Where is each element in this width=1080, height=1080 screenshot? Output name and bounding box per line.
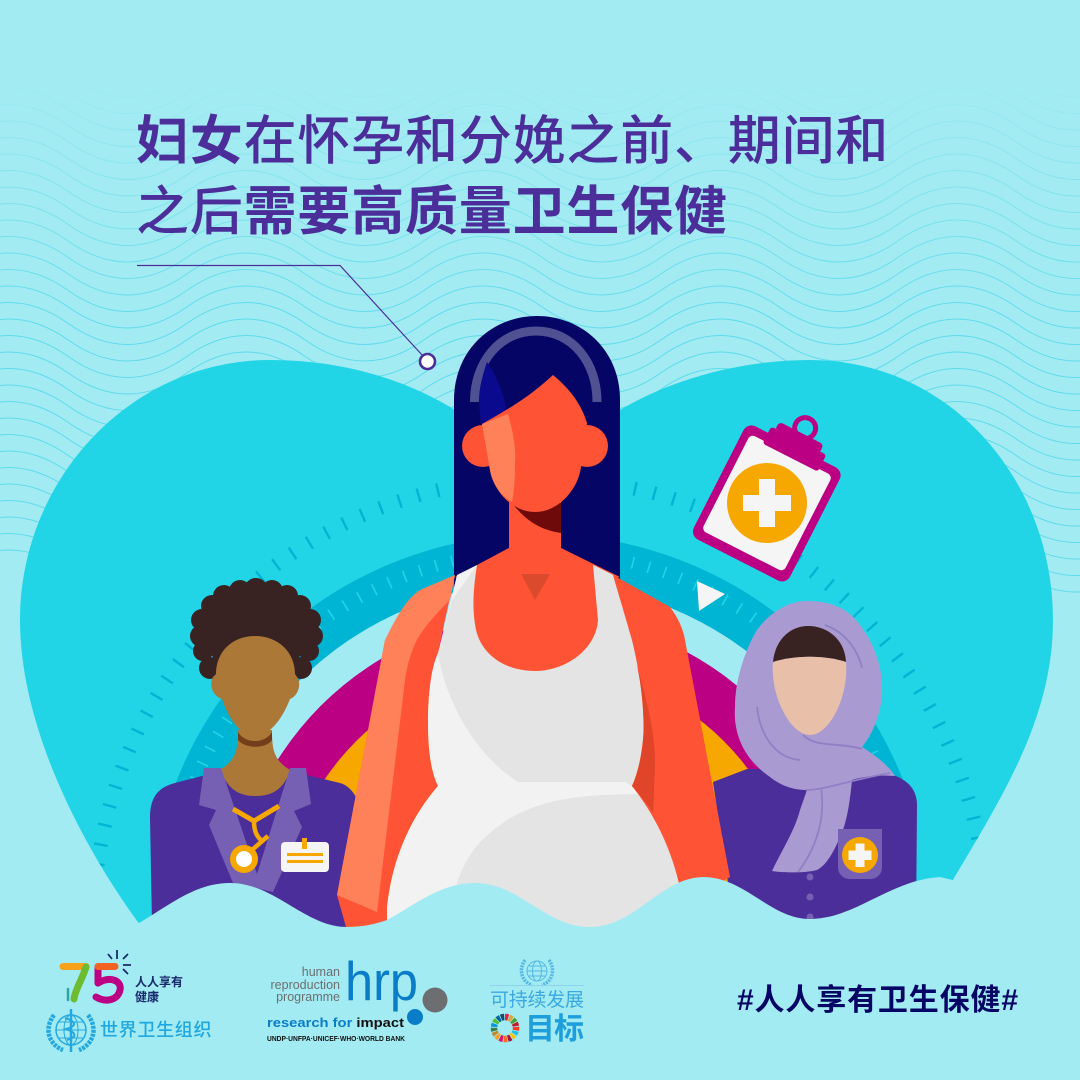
- title: 需要高质量卫生保健: [244, 182, 728, 242]
- slogan: 人人享有: [135, 974, 183, 989]
- ears: [462, 425, 504, 467]
- doctor neck: [220, 730, 290, 800]
- left arm dark: [337, 575, 455, 927]
- figure: doctor with stethoscope: [150, 578, 356, 927]
- face: [482, 375, 587, 512]
- icon: clipboard: [690, 394, 858, 585]
- collar triangle: [521, 574, 550, 600]
- doctor lapels: [199, 768, 311, 892]
- hijab folds: [757, 625, 890, 872]
- doctor jacket: [150, 771, 356, 927]
- nurse buttons: [806, 874, 814, 920]
- left arm light: [337, 575, 455, 912]
- dress: [387, 565, 684, 930]
- dress lower shade: [457, 794, 680, 930]
- title: 之后: [136, 182, 244, 242]
- goals line 1: 可持续发展: [490, 989, 584, 1011]
- logo: hrp: [267, 950, 448, 1043]
- research for impact: research for impact: [267, 1015, 405, 1030]
- nurse hair: [773, 626, 846, 662]
- hrp left label: reproduction: [270, 978, 340, 992]
- heart background shape: [20, 360, 1053, 960]
- nurse pocket and cross: [838, 829, 882, 879]
- bottom wave band: [0, 877, 1080, 1080]
- nurse face: [773, 657, 846, 735]
- wave line pattern: [0, 97, 1080, 592]
- hrp dots: [422, 988, 448, 1012]
- SDG wheel: [489, 1012, 521, 1044]
- icon: play triangle: [697, 581, 725, 611]
- right arm: [613, 575, 730, 895]
- hair strand: [479, 362, 507, 424]
- number 75: [63, 966, 120, 1000]
- hair: [454, 316, 620, 600]
- doctor hair: [190, 578, 323, 682]
- nurse body: [713, 769, 917, 930]
- outer tick ring: [94, 482, 980, 866]
- hrp wordmark: hrp: [345, 950, 418, 1012]
- WHO name: 世界卫生组织: [100, 1020, 212, 1040]
- chest skin: [473, 548, 598, 671]
- doctor face: [211, 636, 299, 736]
- title: 妇女在怀孕和分娩之前、期间和: [136, 112, 889, 171]
- logo: sustainable development goals: [489, 960, 584, 1046]
- WHO emblem: [48, 1009, 94, 1052]
- hrp left label: human: [302, 965, 340, 979]
- hair highlight: [474, 331, 597, 402]
- hashtag: #人人享有卫生保健#: [737, 984, 1018, 1017]
- logo: WHO 75 years: [48, 950, 212, 1052]
- neck: [455, 495, 620, 600]
- slogan: 健康: [135, 989, 159, 1004]
- pointer line: [137, 266, 435, 369]
- id badge: [281, 838, 329, 872]
- figure: nurse in hijab: [713, 601, 917, 930]
- partners: UNDP·UNFPA·UNICEF·WHO·WORLD BANK: [267, 1034, 406, 1043]
- hrp left label: programme: [276, 990, 340, 1004]
- rule: [490, 984, 584, 986]
- figure: pregnant woman: [337, 316, 730, 930]
- hijab: [735, 601, 895, 872]
- sunburst rays: [108, 950, 131, 974]
- concentric arcs: [149, 534, 931, 930]
- UN emblem: [521, 960, 553, 985]
- dress shaded chest: [438, 565, 644, 786]
- goals line 2: 目标: [525, 1013, 584, 1046]
- stethoscope: [233, 806, 279, 870]
